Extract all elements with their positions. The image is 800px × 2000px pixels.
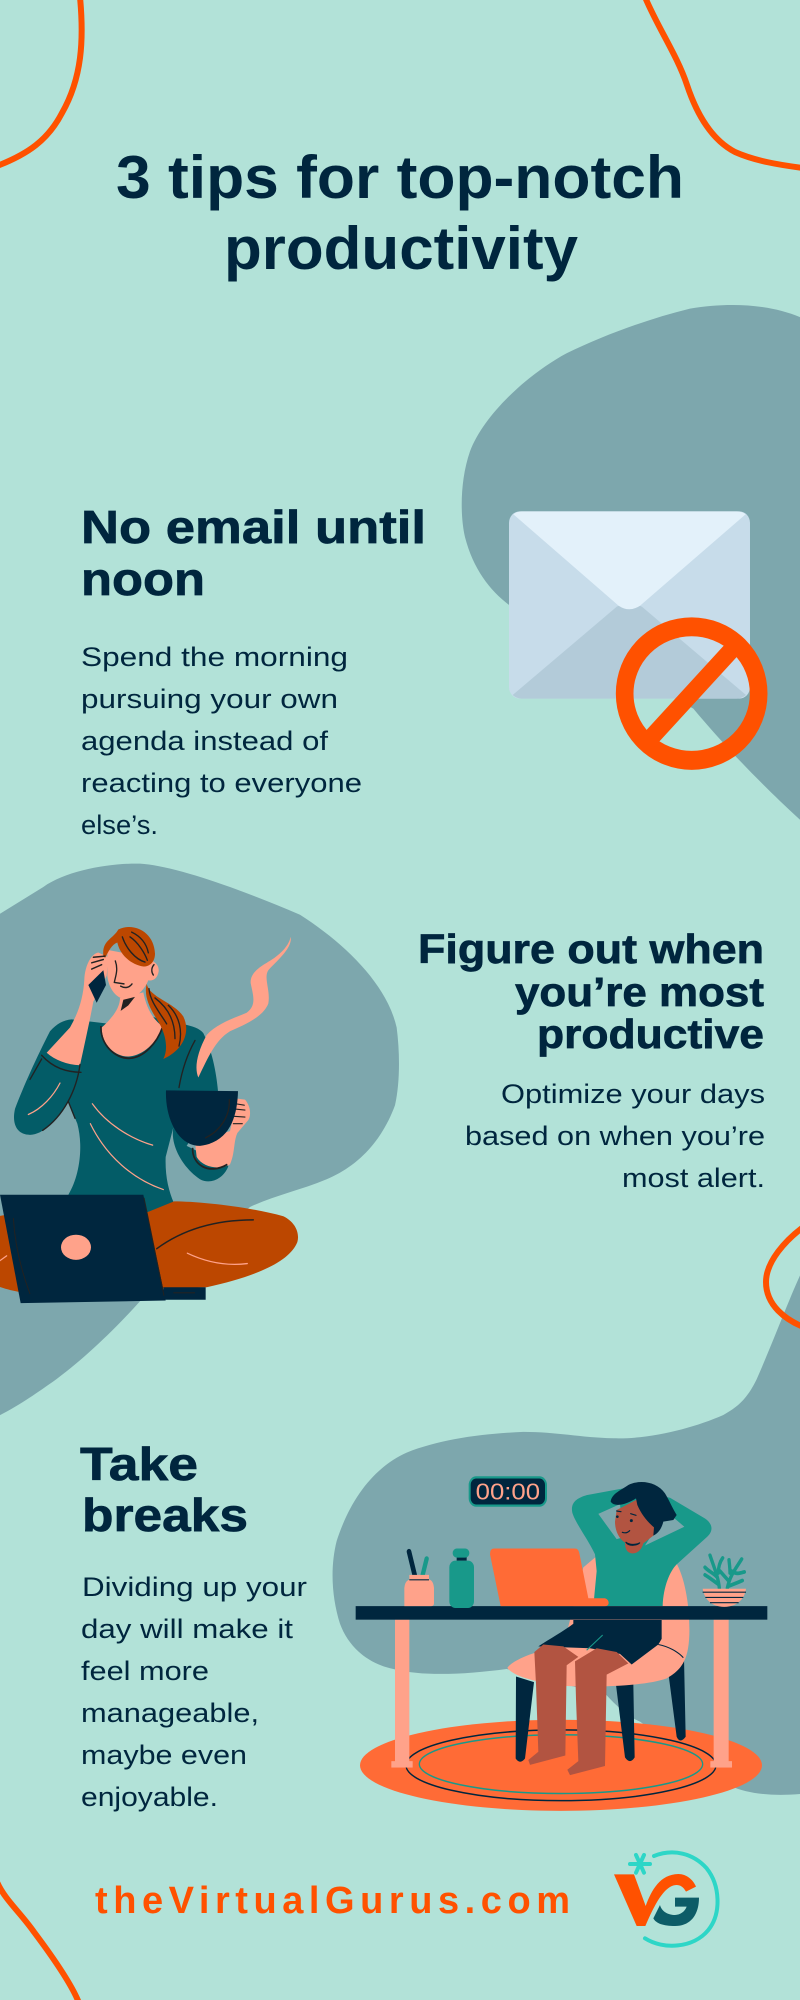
illustration: man relaxing at desk [356,1477,767,1811]
heading: take breaks [80,1438,248,1541]
man: shorts [538,1620,662,1664]
pen pot [404,1552,434,1606]
title: 3 tips for top-notch [116,144,684,211]
man: legs [528,1645,628,1775]
panel: figure out when you're most productive [0,864,765,1416]
icon: envelope [509,511,750,699]
woman: phone [88,970,106,1003]
text block: tip 3 body [81,1572,307,1812]
logo: VG [614,1852,718,1946]
decorative curve: right [766,1225,800,1328]
orange laptop [490,1549,609,1606]
woman: raised arm [47,952,108,1065]
rug [360,1720,762,1811]
background blob: tip 3 [333,1272,800,1795]
background blob: tip 1 [462,305,800,823]
woman: neck shadow [121,997,135,1011]
title [116,144,684,282]
heading: figure out when you're most productive: you’re most [515,969,764,1015]
chair legs [516,1658,686,1762]
heading: figure out when you're most productive: productive [537,1011,764,1057]
text block: tip 3 body: feel more [81,1656,209,1686]
desk [356,1606,767,1768]
man: head and hair [611,1482,677,1553]
text block: tip 3 body: manageable, [81,1698,259,1728]
text block: tip 1 body: agenda instead of [81,726,329,756]
plant [705,1555,744,1588]
woman: face details [92,956,154,988]
chair seat and back [507,1556,689,1687]
woman: head [107,950,159,999]
woman: sweater [14,1016,228,1213]
decorative curve: top right [645,0,800,168]
text block: tip 1 body: else’s. [81,810,158,840]
illustration: woman with phone, coffee and laptop [0,927,298,1303]
text block: tip 2 body: Optimize your days [501,1079,765,1109]
woman: ponytail [146,984,186,1059]
text block: tip 2 body [465,1079,765,1193]
timer [470,1477,546,1506]
plant bowl [703,1589,746,1607]
text block: tip 1 body: Spend the morning [81,642,348,672]
man: sweater [572,1488,711,1606]
heading: no email until noon [81,501,426,605]
decorative curve: top left [0,0,82,166]
woman: chest and neck [102,992,163,1057]
woman: pants [0,1201,298,1292]
woman: sleeve lines [30,1040,195,1130]
heading: take breaks: Take [80,1438,198,1490]
heading: no email until noon: No email until [81,501,426,553]
text block: tip 3 body: maybe even [81,1740,247,1770]
heading: figure out when you're most productive: Figure out when [418,926,764,972]
heading: take breaks: breaks [82,1489,248,1541]
text block: tip 2 body: most alert. [622,1163,765,1193]
text block: tip 1 body: pursuing your own [81,684,338,714]
panel: no email until noon [81,305,800,840]
icon: prohibition sign [625,627,759,760]
text block: tip 1 body: reacting to everyone [81,768,362,798]
footer url: theVirtualGurus.com [95,1880,570,1922]
text block: tip 3 body: enjoyable. [81,1782,218,1812]
text block: tip 1 body [81,642,362,840]
leg crease [157,1220,253,1249]
decorative curve: bottom left [0,1882,79,2000]
text block: tip 2 body: based on when you’re [465,1121,765,1151]
woman: hair [103,927,155,967]
woman: hand on cup [195,1099,250,1167]
background blob: tip 2 [0,864,399,1416]
panel: take breaks [0,1225,800,2000]
heading: no email until noon: noon [81,553,205,605]
steam [196,937,291,1077]
heading: figure out when you're most productive [418,926,764,1057]
text block: tip 3 body: day will make it [81,1614,294,1644]
timer: 00:00 [476,1478,540,1505]
text block: tip 3 body: Dividing up your [82,1572,307,1602]
laptop [163,1287,206,1300]
coffee cup [166,1090,238,1146]
title: productivity [224,215,579,282]
bottle [449,1549,474,1608]
